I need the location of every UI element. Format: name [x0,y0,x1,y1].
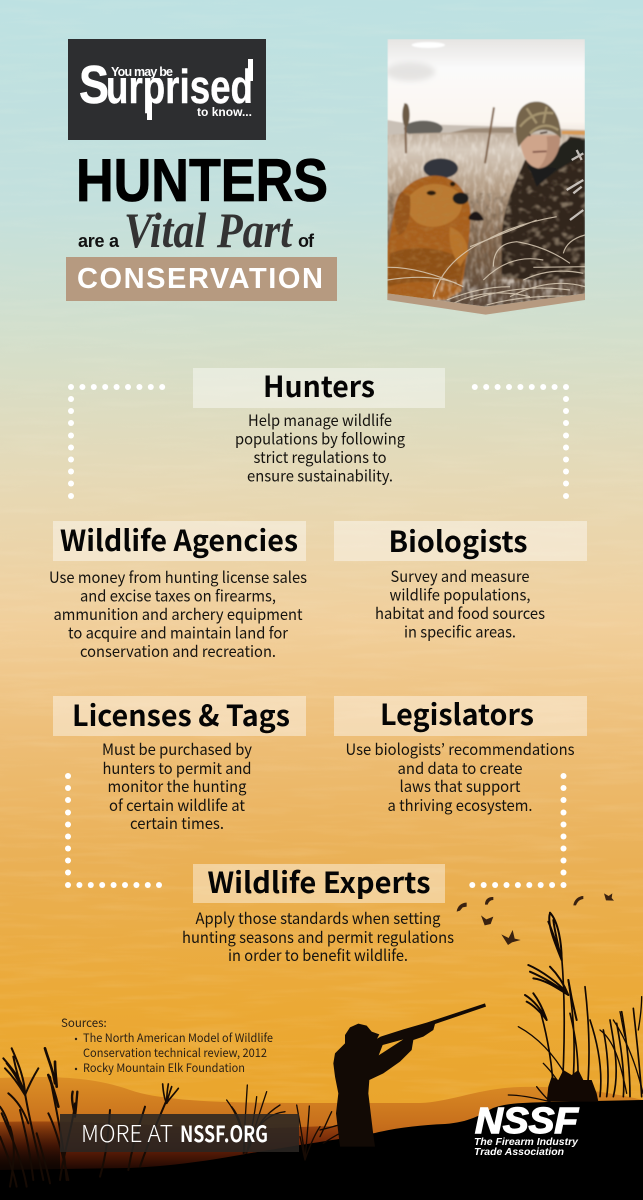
logo: NSSF The Firearm Industry Trade Association: The Firearm Industry [474,1136,579,1148]
button: more at nssf.org: NSSF.ORG [180,1117,268,1149]
dotted connector: bottom left [65,773,162,888]
birds in flight [457,893,614,945]
panel: Licenses and Tags: monitor the hunting [108,775,247,797]
panel: Legislators: Legislators [380,692,534,734]
title: Hunters are a Vital Part of Conservation: of [298,231,315,251]
dotted connector: top left [68,384,165,499]
panel: Biologists [334,519,587,642]
logo: NSSF The Firearm Industry Trade Association: NSSF [475,1100,579,1141]
foreground grass stalks [387,217,585,305]
panel: Biologists: habitat and food sources [375,602,545,624]
panel: Wildlife Agencies: and excise taxes on firearms, [80,584,276,606]
title: Hunters are a Vital Part of Conservation: are a [78,231,120,251]
title: Hunters are a Vital Part of Conservation: Vital Part [124,202,294,258]
title: Hunters are a Vital Part of Conservation: CONSERVATION [77,263,323,295]
panel: Wildlife Experts: in order to benefit wildlife. [228,944,408,966]
panel: Legislators: a thriving ecosystem. [388,794,532,816]
panel: Wildlife Agencies: conservation and recreation. [80,640,276,662]
silhouette: grass left [0,1048,320,1187]
landscape: hills and ground [0,1077,643,1200]
panel: Wildlife Experts: hunting seasons and permit regulations [182,926,454,948]
title: Hunters are a Vital Part of Conservation: HUNTERS [76,147,328,214]
panel: Hunters [193,364,445,486]
logo: You may be Surprised to know [68,39,266,140]
panel: Legislators [334,692,587,816]
logo: You may be Surprised to know: to know... [197,105,252,119]
panel: Hunters: strict regulations to [254,446,386,468]
panel: Hunters: populations by following [235,428,405,450]
panel: Biologists: Biologists [388,519,528,561]
panel: Wildlife Experts: Apply those standards when setting [196,907,441,929]
panel: Wildlife Agencies: Wildlife Agencies [60,518,298,560]
man: jacket [502,137,585,287]
banner tail [387,293,585,315]
panel: Hunters: Help manage wildlife [248,409,392,431]
logo: You may be Surprised to know: You may be [111,65,173,79]
panel: Wildlife Agencies: ammunition and archery equipment [54,603,303,625]
panel: Legislators: Use biologists’ recommendations [346,738,574,760]
panel: Biologists: Survey and measure [390,565,530,587]
panel: Licenses and Tags: hunters to permit and [102,757,252,779]
logo: You may be Surprised to know: urprised [106,60,253,113]
silhouette: grass right with bush [320,913,643,1143]
panel: Wildlife Agencies: Use money from hunting license sales [49,566,307,588]
sources: Rocky Mountain Elk Foundation [83,1060,245,1076]
logo: You may be Surprised to know: S [79,55,109,115]
golden dog [387,176,471,300]
panel: Legislators: laws that support [400,775,521,797]
logo: NSSF The Firearm Industry Trade Association: Trade Association [474,1146,564,1158]
panel: Licenses and Tags [53,693,306,834]
photo: hunter and golden retriever in frosted grass [385,39,585,315]
panel: Licenses and Tags: certain times. [130,812,224,834]
man: face [520,135,560,168]
sources: Sources: [61,1015,107,1031]
logo: NSSF The Firearm Industry Trade Association [474,1100,579,1158]
man: hat [516,102,561,147]
panel: Wildlife Experts: Wildlife Experts [208,860,430,902]
panel: Biologists: in specific areas. [404,620,516,642]
button: more at nssf.org [60,1114,299,1152]
silhouette: hunter aiming shotgun [333,1003,486,1147]
panel: Hunters: Hunters [263,364,375,406]
dotted connector: top right [472,384,569,499]
panel: Wildlife Experts [182,860,454,966]
button: more at nssf.org: MORE AT [81,1115,173,1149]
foreground ground [444,276,585,305]
panel: Licenses and Tags: Licenses & Tags [72,693,290,735]
panel: Legislators: and data to create [398,757,522,779]
sources [61,1015,273,1076]
black dog behind [423,158,458,178]
title: Hunters are a Vital Part of Conservation [66,147,337,301]
panel: Licenses and Tags: of certain wildlife at [109,794,245,816]
panel: Wildlife Agencies [49,518,307,662]
panel: Licenses and Tags: Must be purchased by [102,738,252,760]
panel: Hunters: ensure sustainability. [247,464,393,486]
panel: Biologists: wildlife populations, [390,584,530,606]
sources: Conservation technical review, 2012 [83,1045,267,1061]
dotted connector: bottom right [469,773,566,888]
sources: The North American Model of Wildlife [83,1030,273,1046]
panel: Wildlife Agencies: to acquire and maintain land for [68,622,289,644]
